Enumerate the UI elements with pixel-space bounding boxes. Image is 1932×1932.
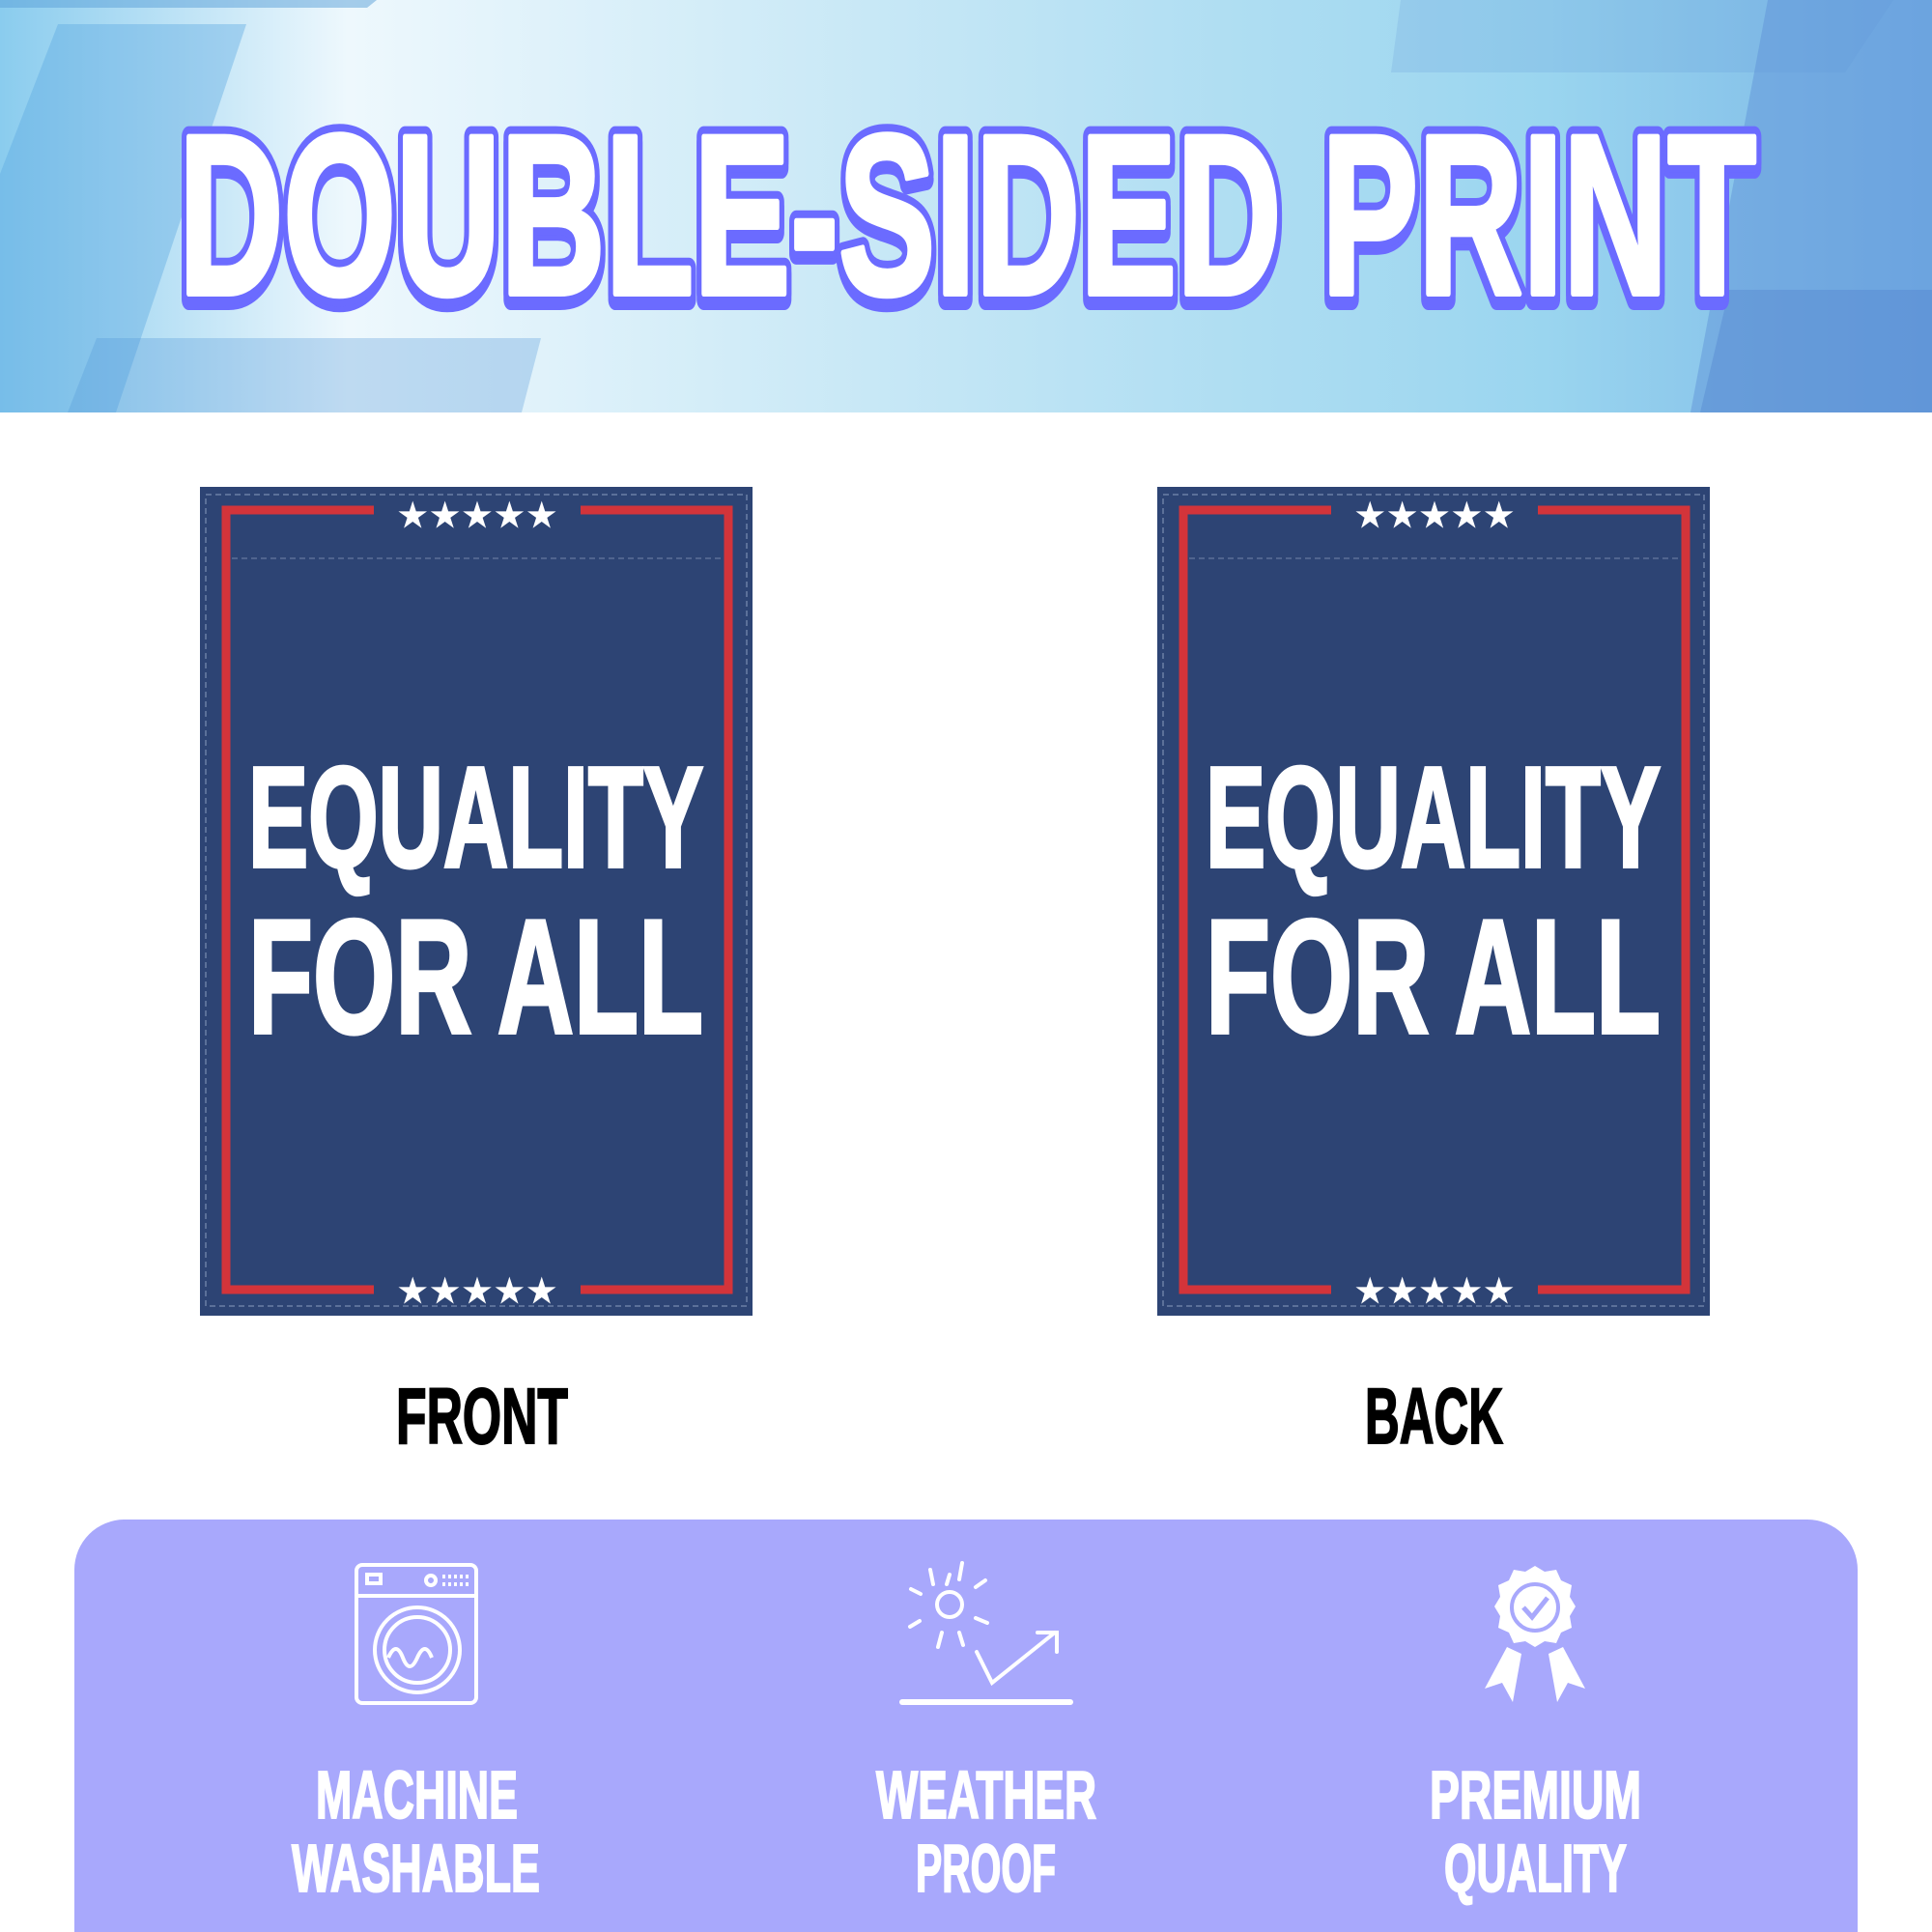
flag text: EQUALITY (1206, 738, 1661, 897)
label: back: BACK (1365, 1373, 1503, 1461)
flag text: FOR ALL (248, 886, 703, 1067)
flag: back (1157, 487, 1710, 1316)
text: weather proof: PROOF (916, 1831, 1056, 1906)
panel: features (74, 1520, 1858, 1932)
flag: back: ★★★★★ (1355, 1273, 1514, 1310)
flag text: FOR ALL (1206, 886, 1661, 1067)
icon: premium quality (1485, 1566, 1585, 1702)
flag text: EQUALITY (248, 738, 703, 897)
red frame (226, 510, 728, 1290)
text: machine washable (292, 1757, 540, 1906)
text: premium quality: QUALITY (1444, 1831, 1627, 1906)
red frame (1183, 510, 1686, 1290)
flag: front: ★★★★★ (398, 1273, 556, 1310)
label: front: FRONT (396, 1373, 568, 1461)
text: machine washable: MACHINE (316, 1757, 518, 1833)
flag text (1206, 738, 1661, 1067)
flag: front (200, 487, 753, 1316)
icon: weather proof (902, 1563, 1070, 1702)
text: premium quality: PREMIUM (1430, 1757, 1641, 1833)
text: machine washable: WASHABLE (292, 1831, 540, 1906)
flag text (248, 738, 703, 1067)
text: weather proof (876, 1757, 1096, 1906)
stars: ★★★★★ (1355, 497, 1514, 534)
text: weather proof: WEATHER (876, 1757, 1096, 1833)
stars: ★★★★★ (398, 497, 556, 534)
text: premium quality (1430, 1757, 1641, 1906)
header banner (0, 0, 1932, 412)
icon: washing machine (356, 1565, 476, 1703)
